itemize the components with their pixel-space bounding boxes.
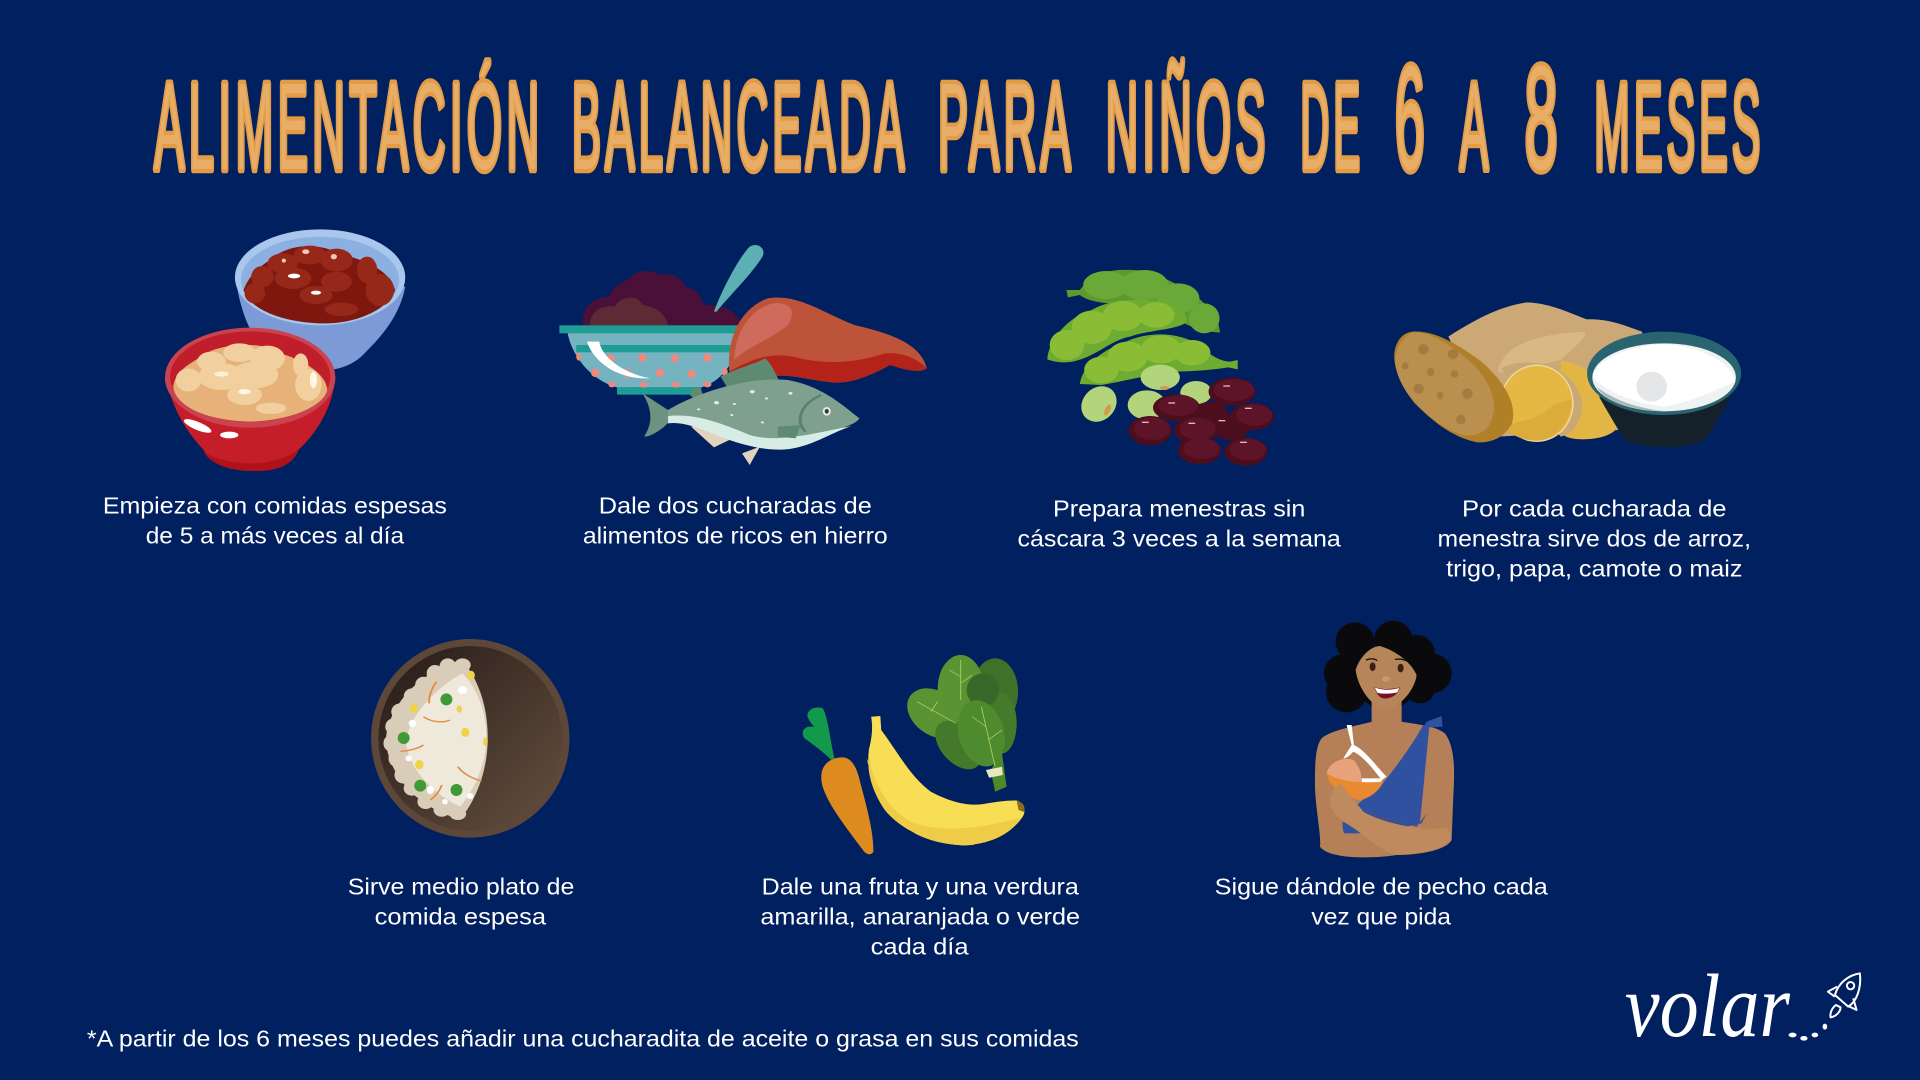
panel: papa y arroz <box>1394 302 1751 582</box>
text: dale dos cucharadas <box>583 493 888 549</box>
text: dale dos cucharadas: Dale dos cucharadas de <box>599 493 872 519</box>
panel: comidas espesas <box>103 229 447 549</box>
text: por cada cucharada: Por cada cucharada de <box>1462 496 1727 522</box>
title: BALANCEADA <box>572 58 909 196</box>
logo: volar: volar <box>1625 957 1791 1056</box>
text: dale una fruta: amarilla, anaranjada o verde <box>760 903 1080 929</box>
title: DE <box>1300 58 1364 196</box>
text: empieza <box>103 493 447 549</box>
panel: medio plato <box>348 639 574 929</box>
title: A <box>1460 58 1493 196</box>
text: empieza: de 5 a más veces al día <box>146 523 405 549</box>
text: prepara menestras <box>1018 496 1342 552</box>
icon: pods and beans <box>1047 270 1274 466</box>
panel: lactancia <box>1215 621 1549 929</box>
text: prepara menestras: Prepara menestras sin <box>1053 496 1305 522</box>
icon: potatoes and rice bowl <box>1394 302 1741 447</box>
title: PARA <box>938 58 1075 196</box>
title: 6 <box>1395 36 1430 201</box>
text: por cada cucharada <box>1438 496 1751 582</box>
icon: two bowls of thick food <box>165 229 405 471</box>
title <box>154 36 1764 201</box>
title: NIÑOS <box>1106 58 1270 196</box>
panel: fruta y verdura <box>760 655 1080 959</box>
text: empieza: Empieza con comidas espesas <box>103 493 447 519</box>
icon: bowl, liver and fish <box>559 245 927 465</box>
footnote: *A partir de los 6 meses puedes añadir una cucharadita de aceite o grasa en sus comidas <box>87 1025 1079 1051</box>
panel: alimentos ricos en hierro <box>559 245 927 549</box>
title: ALIMENTACIÓN <box>154 58 544 196</box>
title: 8 <box>1524 36 1564 201</box>
text: sirve medio plato <box>348 873 574 929</box>
text: sirve medio plato: comida espesa <box>375 903 547 929</box>
icon: half-filled plate <box>371 639 569 838</box>
text: por cada cucharada: menestra sirve dos de arroz, <box>1438 526 1751 552</box>
text: dale una fruta: Dale una fruta y una verdura <box>762 873 1080 899</box>
text: dale una fruta <box>760 873 1080 959</box>
icon: breastfeeding mother <box>1315 621 1454 857</box>
text: prepara menestras: cáscara 3 veces a la semana <box>1018 526 1342 552</box>
text: sigue dándole: Sigue dándole de pecho cada <box>1215 873 1549 899</box>
text: dale dos cucharadas: alimentos de ricos en hierro <box>583 523 888 549</box>
text: sigue dándole: vez que pida <box>1311 903 1452 929</box>
icon: rocket <box>1828 973 1860 1017</box>
text: sigue dándole <box>1215 873 1549 929</box>
panel: menestras <box>1018 270 1342 552</box>
icon: carrot, banana and spinach <box>803 655 1025 854</box>
text: dale una fruta: cada día <box>871 933 970 959</box>
text: por cada cucharada: trigo, papa, camote o maiz <box>1446 556 1742 582</box>
text: sirve medio plato: Sirve medio plato de <box>348 873 574 899</box>
